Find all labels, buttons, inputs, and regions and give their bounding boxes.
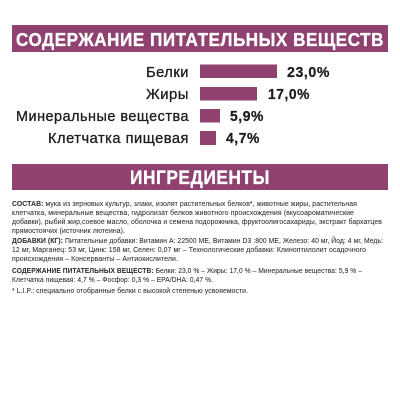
banner: ingredients heading: ИНГРЕДИЕНТЫ [130,167,270,189]
text block: composition [12,199,382,235]
text block: nutrient content [12,266,363,284]
text block: composition: прямостоячих (источник лютеина). [12,226,125,235]
banner: ingredients heading [12,164,388,190]
text block: additives [12,236,383,263]
text block: additives: 12 мг, Марганец: 53 мг, Цинк: 158 мг, Селен: 0,07 мг – Технологические добавки: Клиноптилолит осадочного [12,245,366,254]
row: minerals: Минеральные вещества [16,109,189,125]
row: fibre: Клетчатка пищевая [48,131,189,147]
text block: additives: происхождения – Консерванты – Антиокислители. [12,254,178,263]
row: fibre: 4,7% [226,131,260,147]
row: protein: 23,0% [287,65,330,81]
bar chart: nutrients [16,64,330,147]
row: fat [146,87,310,103]
row: fibre [48,131,260,147]
row: fat: Жиры [146,87,189,103]
text block: composition: СОСТАВ: мука из зерновых культур, злаки, изолят растительных белков*, животные жиры, растительная [12,199,357,208]
footnote: * L.I.P.: специально отобранные белки с высокой степенью усвояемости. [12,286,248,295]
text block: composition: клетчатка, минеральные вещества, гидролизат белков животного происхождения (вкусоароматические [12,208,354,217]
row: protein: Белки [146,65,189,81]
row: minerals: 5,9% [230,109,264,125]
row: fat: 17,0% [268,87,310,103]
text block: nutrient content: Клетчатка пищевая: 4,7 % – Фосфор: 0,3 % – EPA/DHA: 0,47 %. [12,275,213,284]
row: protein [146,64,330,81]
row: minerals [16,109,264,125]
text block: nutrient content: СОДЕРЖАНИЕ ПИТАТЕЛЬНЫХ ВЕЩЕСТВ: Белки: 23,0 % – Жиры: 17,0 % – Минеральные вещества: 5,9 % – [12,266,363,275]
